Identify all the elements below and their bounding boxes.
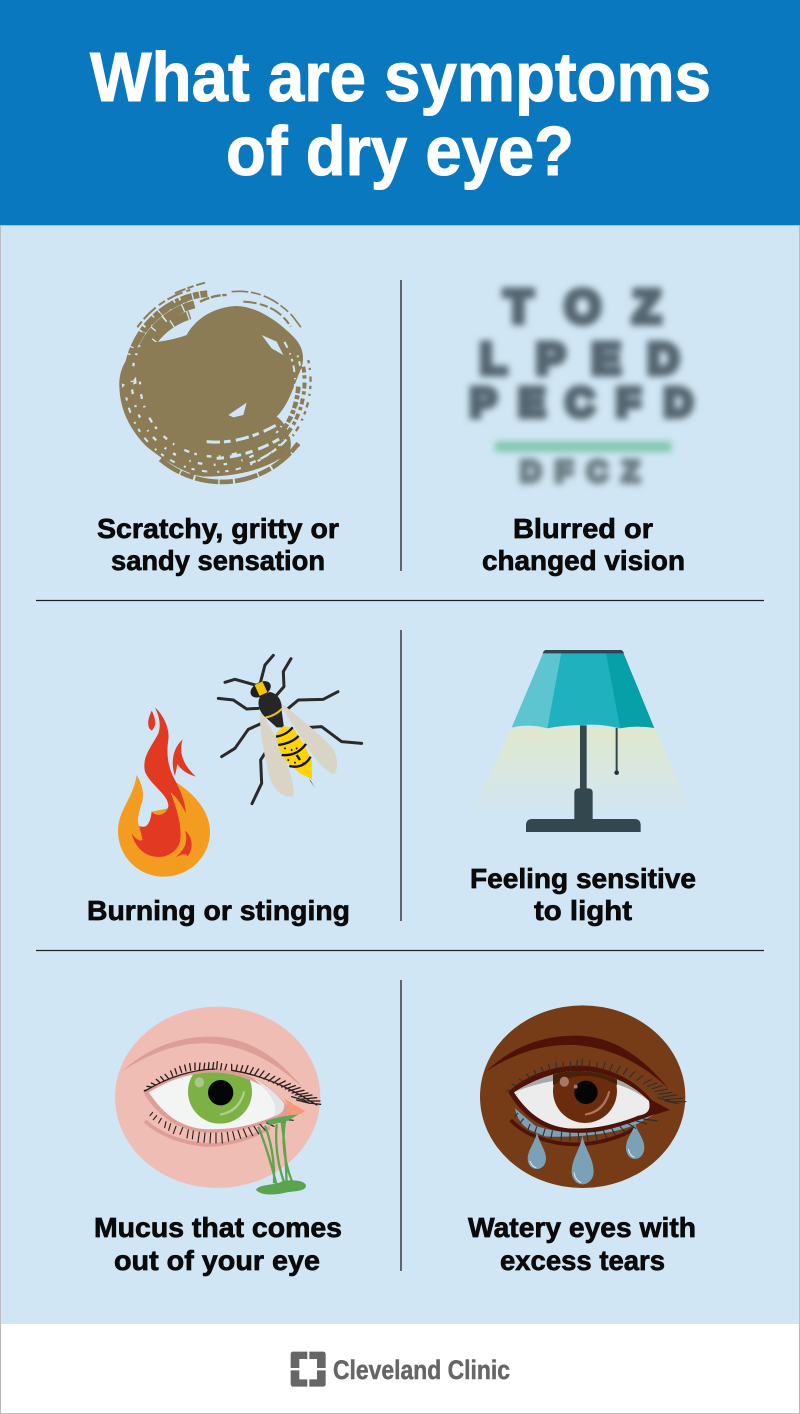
footer [0, 1324, 800, 1414]
caption: Scratchy, gritty or [97, 513, 339, 544]
icon: blurred eye chart: P [470, 381, 497, 425]
caption [468, 1212, 696, 1276]
caption: out of your eye [114, 1245, 320, 1276]
panel: sensitive to light [470, 650, 696, 926]
caption: sandy sensation [111, 545, 325, 576]
icon: blurred eye chart: L [480, 334, 507, 383]
caption: Blurred or [513, 513, 653, 544]
icon: flame [118, 707, 210, 877]
caption: Burning or stinging [87, 895, 350, 926]
caption: Watery eyes with [468, 1212, 696, 1243]
panel: scratchy sensation [97, 283, 339, 576]
icon: blurred eye chart: Z [632, 281, 661, 333]
icon: blurred eye chart: C [587, 455, 608, 488]
caption: Feeling sensitive [470, 863, 696, 894]
icon: blurred eye chart: P [536, 334, 565, 383]
icon: blurred eye chart: F [616, 381, 641, 425]
title: What are symptoms [90, 38, 711, 116]
caption: to light [534, 895, 632, 926]
caption [97, 513, 339, 576]
icon: blurred eye chart: D [520, 455, 541, 488]
icon: sandy brush circle [119, 283, 311, 482]
title: of dry eye? [226, 112, 574, 190]
icon: blurred eye chart [470, 281, 693, 488]
title [90, 38, 711, 190]
icon: blurred eye chart: O [565, 281, 601, 333]
caption [470, 863, 696, 926]
icon: blurred eye chart: F [555, 455, 573, 488]
panel: blurred vision [470, 281, 693, 576]
icon: blurred eye chart: E [591, 334, 621, 383]
icon: blurred eye chart: D [647, 334, 679, 383]
caption: Mucus that comes [94, 1212, 342, 1243]
panel: burning or stinging [87, 655, 362, 926]
icon: Cleveland Clinic logo mark [291, 1352, 326, 1387]
header banner [0, 0, 800, 225]
caption [482, 513, 685, 576]
icon: blurred eye chart: D [664, 381, 693, 425]
page background [0, 225, 800, 1324]
panel: watery eyes [468, 1005, 696, 1276]
icon: blurred eye chart: Z [622, 455, 640, 488]
icon: blurred eye chart: C [566, 381, 594, 425]
caption: changed vision [482, 545, 685, 576]
caption [94, 1212, 342, 1276]
caption: excess tears [500, 1245, 665, 1276]
panel: mucus [94, 1007, 342, 1276]
icon: table lamp [470, 650, 693, 832]
logo wordmark: Cleveland Clinic [333, 1355, 510, 1385]
icon: blurred eye chart: E [518, 381, 545, 425]
icon: wasp [218, 655, 362, 804]
icon: blurred eye chart: T [504, 281, 533, 333]
icon: eye with tears [480, 1005, 686, 1188]
icon: eye with mucus [115, 1007, 321, 1195]
